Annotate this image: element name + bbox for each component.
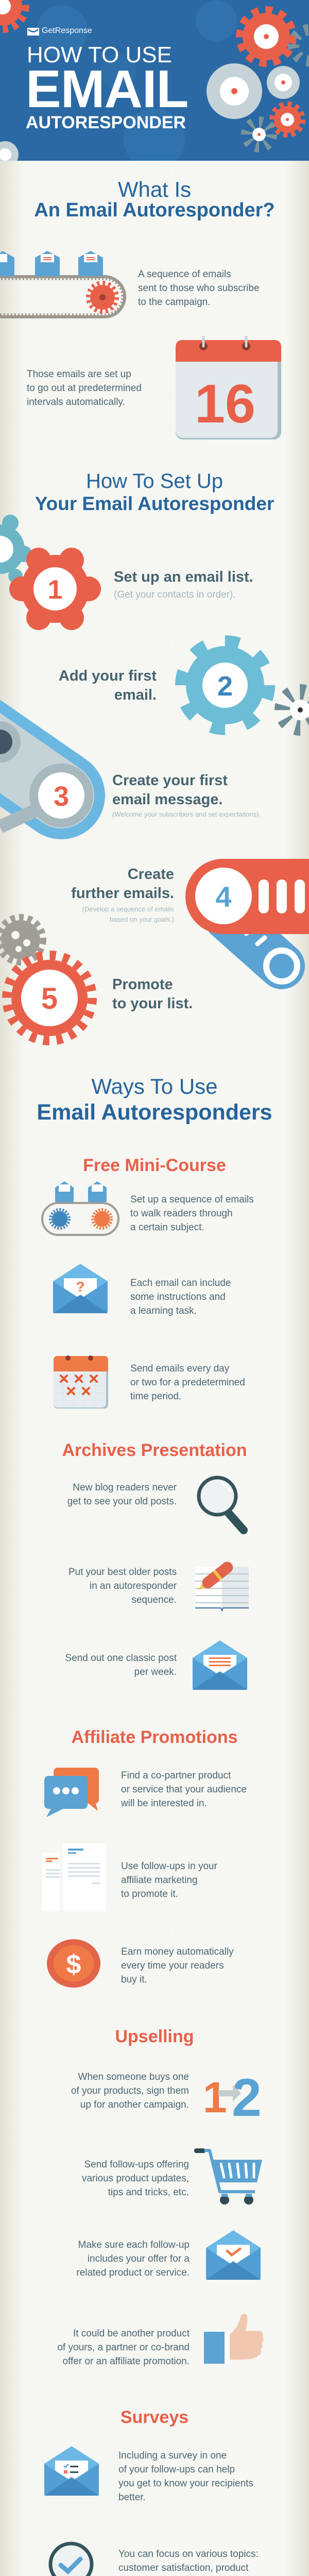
text: mini-course 1: a certain subject.: [130, 1222, 204, 1233]
text: upsell 1: of your products, sign them: [71, 2086, 189, 2096]
text: step 5: [112, 976, 193, 1012]
heading: how to set up: Your Email Autoresponder: [35, 493, 274, 514]
text: affiliate 3: [121, 1946, 234, 1985]
text: upsell 4: of yours, a partner or co-brand: [57, 2342, 190, 2353]
text: upsell 1: When someone buys one: [78, 2072, 189, 2082]
text: upsell 2: Send follow-ups offering: [84, 2159, 189, 2170]
subheading: free mini-course: Free Mini-Course: [83, 1156, 226, 1175]
text: upsell 2: various product updates,: [82, 2173, 189, 2184]
heading: ways to use: [37, 1074, 272, 1125]
subheading: affiliate promotions: Affiliate Promotions: [71, 1727, 238, 1747]
text: step 2: [59, 668, 157, 703]
text: archives 1: [67, 1482, 177, 1507]
heading: how to set up: How To Set Up: [86, 470, 223, 493]
logo: GetResponse: [42, 26, 92, 35]
text: mini-course 3: Send emails every day: [130, 1363, 229, 1374]
text: upsell 3: Make sure each follow-up: [78, 2240, 190, 2250]
text: surveys 2: [118, 2547, 259, 2576]
heading: what is: What Is: [118, 177, 191, 201]
text: mini-course 1: to walk readers through: [130, 1208, 233, 1219]
text: mini-course 1: Set up a sequence of emails: [130, 1194, 254, 1205]
text: affiliate 1: or service that your audience: [121, 1784, 247, 1795]
text: upsell 4: [57, 2327, 190, 2368]
text: mini-course 1: [130, 1194, 254, 1233]
icon: coin: $: [66, 1950, 81, 1979]
text: archives 2: Put your best older posts: [68, 1567, 177, 1578]
icon: step 5 gear: 5: [41, 982, 58, 1015]
icon: envelope question: [53, 1264, 108, 1313]
text: step 1: (Get your contacts in order).: [114, 589, 236, 600]
icon: chat bubbles: [44, 1768, 99, 1817]
text: definition: A sequence of emails: [138, 269, 231, 280]
heading: what is: An Email Autoresponder?: [34, 199, 275, 221]
text: affiliate 2: Use follow-ups in your: [121, 1861, 217, 1872]
text: affiliate 1: [121, 1770, 247, 1809]
icon: thumbs up: [204, 2313, 265, 2365]
text: affiliate 3: every time your readers: [121, 1960, 224, 1971]
text: surveys 1: [118, 2449, 253, 2504]
icon: step 3 belt: [0, 700, 105, 839]
text: step 4: Create: [128, 866, 174, 883]
text: intervals: [27, 369, 142, 408]
text: definition: sent to those who subscribe: [138, 283, 260, 294]
text: surveys 2: customer satisfaction, product: [118, 2563, 248, 2573]
icon: mini conveyor: [41, 1181, 119, 1236]
icon: magnifier: [197, 1476, 248, 1534]
text: archives 3: Send out one classic post: [65, 1653, 177, 1664]
text: affiliate 2: [121, 1861, 217, 1900]
icon: step 1 gear: [0, 515, 101, 630]
text: affiliate 3: buy it.: [121, 1974, 147, 1985]
text: step 5: to your list.: [112, 995, 193, 1012]
text: definition: [138, 269, 260, 308]
heading: ways to use: Email Autoresponders: [37, 1100, 272, 1125]
icon: 1 to 2: 1: [203, 2073, 227, 2122]
icon: 1 to 2: [203, 2068, 262, 2128]
icon: step 2 gear: [175, 635, 309, 736]
text: archives 1: New blog readers never: [73, 1482, 177, 1493]
text: step 3: Create your first: [112, 772, 228, 789]
header decorative gears: [0, 0, 309, 161]
text: mini-course 3: [130, 1363, 245, 1402]
text: affiliate 1: Find a co-partner product: [121, 1770, 231, 1781]
text: step 3: (Welcome your subscribers and set expectations).: [112, 810, 261, 818]
text: surveys 2: You can focus on various topics:: [118, 2549, 259, 2560]
text: surveys 1: you get to know your recipients: [118, 2478, 253, 2489]
icon: envelope lines: [193, 1640, 247, 1690]
icon: step 5 gear: [0, 914, 97, 1045]
icon: step 3 belt: 3: [54, 781, 69, 812]
header banner: [0, 0, 309, 161]
heading: what is: [34, 177, 275, 221]
text: step 1: Set up an email list.: [114, 569, 253, 585]
icon: calendar crosses: [54, 1355, 108, 1409]
text: surveys 1: better.: [118, 2492, 146, 2503]
subheading: surveys: Surveys: [121, 2408, 188, 2427]
icon: calendar 16: [176, 336, 281, 439]
text: archives 3: [65, 1653, 177, 1677]
icon: 1 to 2: 2: [232, 2068, 262, 2128]
title: EMAIL: [26, 59, 188, 118]
text: step 4: [71, 866, 174, 923]
text: definition: to the campaign.: [138, 297, 210, 308]
icon: conveyor with envelopes: [0, 251, 126, 318]
text: intervals: to go out at predetermined: [27, 383, 142, 394]
subheading: upselling: Upselling: [115, 2027, 194, 2046]
text: step 4: based on your goals.): [110, 916, 174, 923]
text: surveys 1: of your follow-ups can help: [118, 2464, 235, 2475]
heading: ways to use: Ways To Use: [91, 1074, 218, 1098]
text: upsell 1: [71, 2072, 189, 2110]
icon: coin: [47, 1939, 100, 1988]
icon: cart: [194, 2148, 263, 2210]
text: affiliate 2: affiliate marketing: [121, 1875, 198, 1886]
icon: calendar 16: 16: [195, 374, 255, 434]
text: mini-course 3: or two for a predetermined: [130, 1377, 245, 1388]
text: archives 2: in an autoresponder: [90, 1581, 177, 1591]
text: upsell 2: [82, 2158, 189, 2199]
icon: documents: [42, 1843, 106, 1911]
text: step 3: [112, 772, 261, 818]
text: intervals: intervals automatically.: [27, 397, 125, 408]
heading: how to set up: [35, 470, 274, 514]
text: step 2: Add your first: [59, 668, 157, 684]
text: upsell 2: tips and tricks, etc.: [108, 2187, 189, 2198]
text: mini-course 2: a learning task.: [130, 1306, 197, 1316]
text: archives 1: get to see your old posts.: [67, 1496, 177, 1507]
text: upsell 3: [76, 2238, 190, 2280]
text: upsell 1: up for another campaign.: [80, 2099, 189, 2110]
text: affiliate 1: will be interested in.: [121, 1798, 207, 1809]
icon: step 1 gear: 1: [48, 575, 62, 605]
icon: notebook pencil: [195, 1562, 249, 1612]
text: surveys 1: Including a survey in one: [118, 2450, 227, 2461]
text: mini-course 2: some instructions and: [130, 1292, 226, 1302]
text: step 2: email.: [114, 687, 157, 703]
icon: envelope checklist: [44, 2446, 99, 2496]
title: [26, 42, 188, 132]
text: upsell 4: It could be another product: [73, 2328, 190, 2339]
icon: step 4 pill: 4: [215, 880, 232, 913]
text: step 4: (Develop a sequence of emails: [82, 905, 174, 913]
text: mini-course 3: time period.: [130, 1391, 181, 1402]
text: upsell 4: offer or an affiliate promotion.: [63, 2356, 190, 2367]
text: step 3: email message.: [112, 791, 222, 808]
text: step 1: [114, 569, 253, 600]
text: mini-course 2: [130, 1278, 231, 1316]
text: mini-course 2: Each email can include: [130, 1278, 231, 1289]
icon: magnifier check: [48, 2541, 98, 2576]
text: upsell 3: includes your offer for a: [88, 2253, 190, 2264]
icon: envelope check: [206, 2230, 261, 2280]
subheading: archives presentation: Archives Presentation: [62, 1440, 247, 1460]
text: upsell 3: related product or service.: [76, 2267, 190, 2278]
text: archives 3: per week.: [134, 1667, 177, 1677]
title: AUTORESPONDER: [26, 113, 186, 132]
icon: step 2 gear: 2: [217, 671, 233, 702]
text: affiliate 2: to promote it.: [121, 1889, 178, 1900]
text: intervals: Those emails are set up: [27, 369, 131, 380]
text: archives 2: [68, 1567, 177, 1605]
title: HOW TO USE: [27, 42, 172, 67]
icon: envelope question: ?: [76, 1279, 85, 1295]
text: step 4: further emails.: [71, 885, 174, 902]
text: step 5: Promote: [112, 976, 173, 993]
icon: step 4 pill: [185, 859, 309, 989]
text: affiliate 3: Earn money automatically: [121, 1946, 234, 1957]
text: archives 2: sequence.: [131, 1595, 177, 1605]
